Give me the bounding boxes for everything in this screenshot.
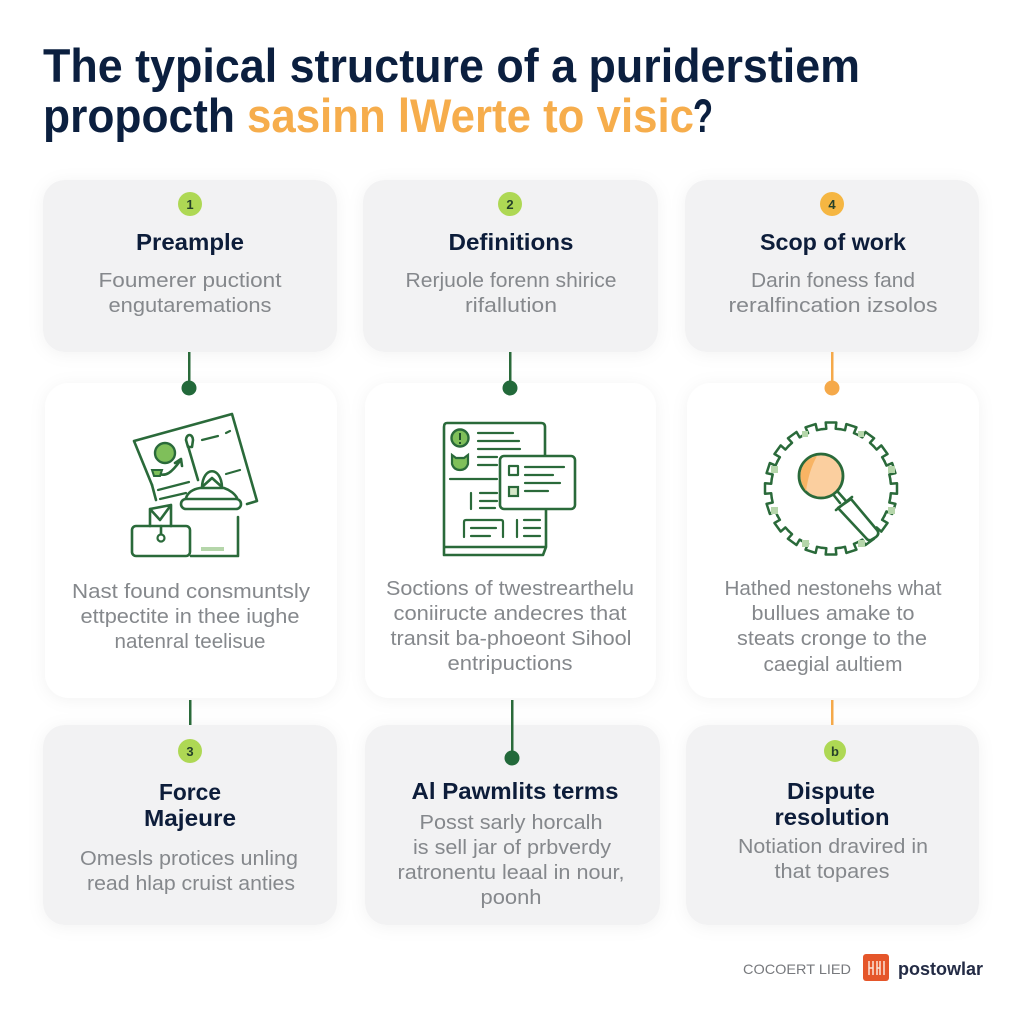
text: dispute resolution: Notiation dravired in <box>738 835 928 858</box>
title <box>43 39 860 142</box>
text: middle right: steats cronge to the <box>737 627 927 650</box>
footer logo: postowlar <box>898 959 983 979</box>
text: payment terms: Posst sarly horcalh <box>420 811 602 834</box>
heading: dispute resolution <box>774 778 890 830</box>
badge 5 <box>824 740 846 762</box>
text: force majeure: read hlap cruist anties <box>87 872 295 895</box>
badge 4 <box>820 192 844 216</box>
heading: scope of work: Scop of work <box>760 229 906 255</box>
connector: column 1 top <box>182 352 196 396</box>
connector: column 1 bottom <box>189 700 192 725</box>
text: scope of work <box>728 269 938 317</box>
panel: middle centre <box>365 383 656 698</box>
text: payment terms: ratronentu leaal in nour, <box>398 861 624 884</box>
text: preamble <box>98 269 282 317</box>
connector: column 2 top <box>502 352 518 396</box>
title: The typical structure of a puriderstiem <box>43 39 860 92</box>
heading: dispute resolution: Dispute <box>787 778 875 804</box>
heading: force majeure: Majeure <box>144 805 236 831</box>
text: middle right <box>724 577 942 676</box>
text: definitions: Rerjuole forenn shirice <box>406 269 616 292</box>
text: middle right: Hathed nestonehs what <box>724 577 942 600</box>
text: middle right: bullues amake to <box>752 602 914 625</box>
text: payment terms <box>398 811 624 909</box>
panel: middle right <box>687 383 979 698</box>
text: middle right: caegial aultiem <box>764 653 902 676</box>
heading: force majeure <box>144 779 236 831</box>
heading: payment terms: Al Pawmlits terms <box>412 778 618 804</box>
title: ? <box>693 89 713 142</box>
text: force majeure: Omesls protices unling <box>80 847 298 870</box>
badge 4: 4 <box>828 197 836 212</box>
text: dispute resolution <box>738 835 928 883</box>
text: force majeure <box>80 847 298 895</box>
connector: column 3 bottom <box>831 700 834 725</box>
text: middle left: ettpectite in thee iughe <box>80 605 300 628</box>
badge 2: 2 <box>506 197 514 212</box>
badge 3 <box>178 739 202 763</box>
text: preamble: engutaremations <box>108 294 272 317</box>
text: definitions: rifallution <box>465 294 557 317</box>
text: scope of work: reralfincation izsolos <box>728 294 938 317</box>
panel: middle left <box>45 383 337 698</box>
text: middle centre: transit ba-phoeont Sihool <box>390 627 632 650</box>
badge 2 <box>498 192 522 216</box>
panel: preamble <box>43 180 337 352</box>
badge 5: b <box>831 744 839 759</box>
text: middle left: natenral teelisue <box>114 630 266 653</box>
icon: contract document with checklist <box>444 423 575 555</box>
text: preamble: Foumerer puctiont <box>98 269 282 292</box>
badge 1 <box>178 192 202 216</box>
badge 1: 1 <box>186 197 194 212</box>
panel: force majeure <box>43 725 337 925</box>
text: definitions <box>406 269 616 317</box>
icon: logo mark <box>863 954 889 981</box>
heading: dispute resolution: resolution <box>774 804 890 830</box>
text: middle left <box>72 580 311 653</box>
heading: definitions: Definitions <box>448 229 574 255</box>
text: payment terms: is sell jar of prbverdy <box>413 836 612 859</box>
panel: dispute resolution <box>686 725 979 925</box>
connector: column 3 top <box>824 352 840 396</box>
heading: preamble: Preample <box>136 229 244 255</box>
title: propocth <box>43 89 235 142</box>
text: middle centre: Soctions of twestrearthelu <box>386 577 634 600</box>
footer logo: COCOERT LIED <box>743 961 851 977</box>
panel: definitions <box>363 180 658 352</box>
text: scope of work: Darin foness fand <box>751 269 915 292</box>
heading: force majeure: Force <box>159 779 221 805</box>
icon: magnifier in gear <box>765 422 897 554</box>
footer logo <box>743 954 983 981</box>
title: sasinn lWerte to visic <box>247 89 694 142</box>
text: middle left: Nast found consmuntsly <box>72 580 311 603</box>
text: payment terms: poonh <box>480 886 542 909</box>
connector: column 2 bottom <box>504 700 520 766</box>
text: middle centre: entripuctions <box>448 652 572 675</box>
text: dispute resolution: that topares <box>774 860 890 883</box>
icon: documents and hat <box>132 414 257 556</box>
text: middle centre <box>386 577 634 675</box>
badge 3: 3 <box>186 744 194 759</box>
panel: scope of work <box>685 180 979 352</box>
panel: payment terms <box>365 725 660 925</box>
text: middle centre: coniiructe andecres that <box>394 602 627 625</box>
